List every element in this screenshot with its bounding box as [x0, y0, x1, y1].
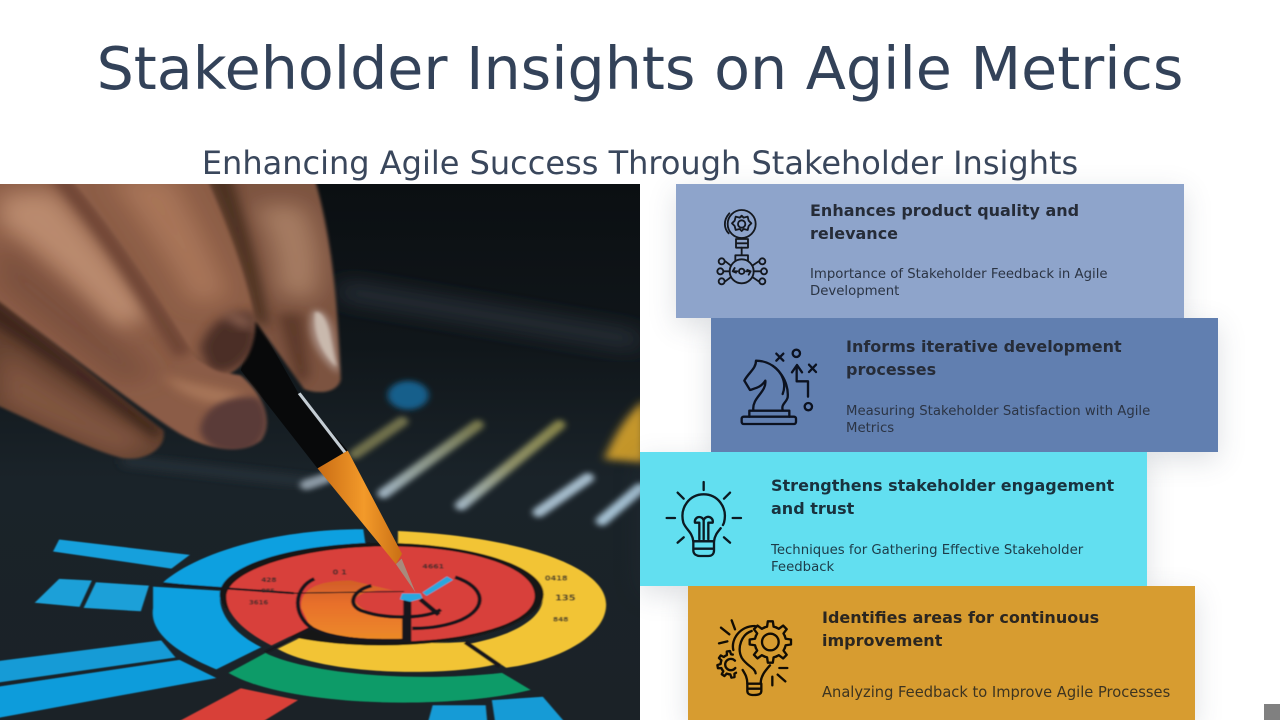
pencil body: [241, 317, 416, 592]
small gear: [717, 651, 737, 678]
subtitle: Enhancing Agile Success Through Stakeholder Insights: [202, 144, 1078, 182]
chart lines: [163, 577, 500, 666]
chart numbers: 848: [553, 616, 569, 623]
chart numbers: 3616: [249, 599, 269, 606]
finger: knuckle and nail: [0, 184, 269, 451]
finger: middle: [72, 184, 258, 374]
chart centre marker: [400, 594, 422, 602]
radial chart: [0, 529, 606, 720]
heading: [771, 476, 1114, 518]
red disc: [220, 543, 544, 645]
heading: [822, 608, 1099, 650]
heading: [810, 201, 1079, 243]
panel: card 2 informs iterative development: [711, 318, 1218, 452]
hand: [0, 184, 343, 460]
description: Measuring Stakeholder Satisfaction with Agile: [846, 404, 1150, 419]
heading: Identifies areas for continuous: [822, 608, 1099, 627]
description: [770, 543, 1084, 575]
icon: chess knight with strategy arrow: [740, 348, 818, 426]
icon: bulb with gear and network nodes: [716, 209, 768, 286]
title: Stakeholder Insights on Agile Metrics: [97, 35, 1183, 103]
photo: hand pointing a pencil at a colourful radial chart: [0, 184, 640, 720]
blue ring: [163, 529, 365, 589]
heading: processes: [846, 360, 936, 379]
heading: Enhances product quality and: [810, 201, 1079, 220]
chart numbers: 428: [261, 577, 277, 584]
yellow ring: [398, 531, 606, 668]
green ring: [229, 653, 531, 703]
description: Analyzing Feedback to Improve Agile Processes: [822, 684, 1170, 701]
description: Metrics: [846, 421, 894, 436]
heading: [846, 337, 1122, 379]
icon: bulb with gears: [716, 619, 792, 696]
blurred background bars: [306, 381, 645, 521]
chart numbers: 4661: [422, 562, 444, 570]
description: Techniques for Gathering Effective Stakeholder: [771, 543, 1083, 558]
heading: improvement: [822, 631, 942, 650]
orange sector: [301, 581, 402, 640]
icon: light bulb with rays: [666, 480, 742, 558]
heading: relevance: [810, 224, 898, 243]
heading: Strengthens stakeholder engagement: [771, 476, 1114, 495]
description: Importance of Stakeholder Feedback in Agile: [810, 267, 1108, 282]
finger: thumb side with nail: [207, 184, 343, 394]
heading: Informs iterative development: [846, 337, 1122, 356]
panel: card 1 enhances product quality: [676, 184, 1184, 318]
heading: and trust: [771, 499, 854, 518]
chart numbers: 0 1: [333, 568, 347, 576]
finger: lower: [0, 300, 166, 460]
corner marker: [1264, 704, 1280, 720]
panel: card 3 strengthens stakeholder engagement: [640, 452, 1147, 586]
chart numbers: 885: [261, 588, 275, 594]
description: [846, 404, 1150, 436]
description: Development: [810, 284, 899, 299]
panel: card 4 identifies areas for improvement: [688, 586, 1195, 720]
chart numbers: 135: [555, 594, 576, 603]
description: [810, 267, 1108, 299]
description: Feedback: [771, 560, 834, 575]
chart numbers: 0418: [545, 574, 568, 582]
chart numbers: [249, 562, 576, 623]
